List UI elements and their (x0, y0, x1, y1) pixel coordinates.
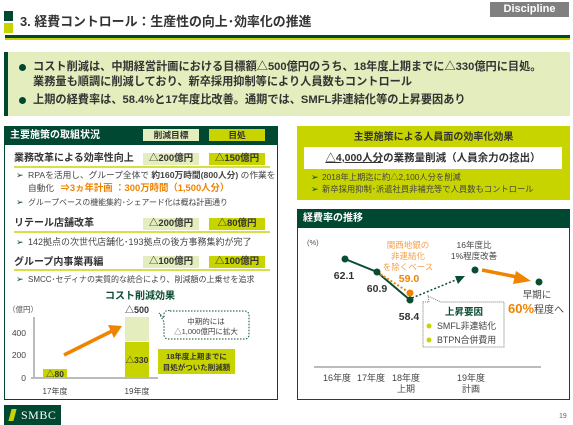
title: 3. 経費コントロール：生産性の向上･効率化の推進 (20, 14, 311, 29)
discipline tag (490, 2, 569, 17)
bar chart: cost reduction: 200 (12, 350, 26, 360)
discipline tag: Discipline (504, 3, 555, 15)
line chart: expense ratio: 関西地銀の (387, 240, 429, 250)
line chart: expense ratio: 計画 (462, 383, 480, 394)
bar chart: cost reduction (8, 304, 158, 396)
headcount callout: △4,000人分の業務量削減（人員余力の捻出） (325, 152, 541, 164)
header rule (5, 35, 570, 40)
line chart: expense ratio: (%) (307, 238, 319, 247)
measure 1 text 2: ➢ (16, 197, 24, 207)
cost reduction chart heading: コスト削減効果 (105, 291, 175, 302)
measure 3 text: SMCC･セディナの実質的な統合により、削減額の上乗せを追求 (28, 275, 255, 284)
headcount heading: 主要施策による人員面の効率化効果 (354, 132, 513, 143)
summary bullet 1: 業務量も順調に削減しており、新卒採用抑制等により人員数もコントロール (33, 76, 412, 88)
bar chart: cost reduction: △330 (126, 355, 149, 365)
column label: prospect (209, 129, 265, 141)
label: achieved amount (158, 349, 235, 374)
headcount text: ➢ (311, 184, 319, 194)
line chart: expense ratio: 18年度 (392, 372, 420, 383)
line chart: expense ratio (307, 238, 564, 394)
line chart: expense ratio: 16年度比 (457, 240, 492, 250)
measure 1 text (16, 170, 275, 192)
callout: medium term: △1,000億円に拡大 (174, 326, 238, 336)
page number: 19 (559, 413, 567, 420)
measure 3 target: △100億円 (149, 256, 193, 267)
logo: SMBC (4, 405, 61, 425)
line chart: expense ratio: 16年度 (323, 372, 351, 383)
bar chart: cost reduction: 19年度 (125, 386, 149, 396)
summary bullet 1 (19, 60, 541, 88)
expense ratio header: 経費率の推移 (303, 213, 363, 224)
measure 3 heading: グループ内事業再編 (14, 257, 103, 268)
line chart: expense ratio: 1%程度改善 (451, 251, 498, 261)
line chart: expense ratio: 60%程度へ (508, 301, 564, 316)
line chart: expense ratio: 早期に (523, 290, 551, 301)
callout: medium term: 中期的には (187, 316, 225, 326)
measure 3 prospect: △100億円 (215, 256, 259, 267)
panel: expense ratio (297, 209, 570, 400)
measure 2 text: ➢ (16, 237, 24, 247)
bar chart: cost reduction: △80 (46, 369, 64, 379)
measure 2 prospect (209, 218, 265, 230)
panel header (4, 126, 278, 145)
expense ratio header (297, 209, 570, 228)
measure 1 text: RPAを活用し、グループ全体で 約160万時間(800人分) の作業を (28, 170, 275, 180)
line chart: expense ratio: BTPN合併費用 (437, 334, 496, 345)
headcount text (311, 172, 534, 194)
summary bullet 2: 上期の経費率は、58.4%と17年度比改善。通期では、SMFL非連結化等の上昇要因あり (33, 94, 466, 106)
line chart: expense ratio: 60.9 (367, 283, 387, 295)
column label: target (143, 129, 199, 141)
headcount callout (304, 147, 562, 169)
headcount text: ➢ (311, 172, 319, 182)
bar chart: cost reduction: 17年度 (43, 386, 67, 396)
line chart: expense ratio: 19年度 (457, 372, 485, 383)
measure 1 heading: 業務改革による効率性向上 (14, 153, 134, 164)
measure 1 prospect: △150億円 (215, 153, 259, 164)
measure 1 text: ➢ (16, 170, 24, 180)
callout: medium term (158, 310, 250, 340)
line chart: expense ratio: を除くベース (383, 262, 433, 272)
measure 2 target: △200億円 (149, 218, 193, 229)
panel header: 主要施策の取組状況 (10, 130, 100, 141)
measure 3 text: ➢ (16, 274, 24, 284)
panel: main measures (4, 126, 278, 400)
headcount text: 2018年上期迄に約△2,100人分を削減 (322, 172, 461, 182)
headcount text: 新卒採用抑制･派遣社員非補充等で人員数もコントロール (322, 184, 534, 194)
line chart: expense ratio: SMFL非連結化 (437, 320, 496, 331)
column label: target: 削減目標 (154, 130, 188, 140)
bar chart: cost reduction: （億円） (8, 304, 38, 314)
bar chart: cost reduction: 400 (12, 328, 26, 338)
label: achieved amount: 18年度上期までに (166, 352, 227, 361)
measure 2 text: 142拠点の次世代店舗化･193拠点の後方事務集約が完了 (28, 237, 252, 247)
panel: headcount efficiency (297, 126, 570, 200)
line chart: expense ratio: 62.1 (334, 270, 354, 282)
measure 2 heading: リテール店舗改革 (14, 218, 94, 229)
summary bullet 1: コスト削減は、中期経営計画における目標額△500億円のうち、18年度上期までに△330億円に目処。 (33, 61, 541, 73)
measure 1 target: △200億円 (149, 153, 193, 164)
line chart: expense ratio: 非連結化 (391, 251, 425, 261)
logo: SMBC: SMBC (21, 408, 56, 422)
column label: prospect: 目処 (228, 130, 246, 140)
measure 1 text: 自動化 ⇒3ヵ年計画 ：300万時間（1,500人分） (28, 182, 229, 192)
header marker (4, 11, 13, 33)
line chart: expense ratio: 59.0 (399, 273, 419, 285)
bar chart: cost reduction: 0 (21, 373, 26, 383)
line chart: expense ratio: 17年度 (357, 372, 385, 383)
line chart: expense ratio: 上期 (397, 384, 415, 394)
measure 1 text 2: グループベースの機能集約･シェアード化は概ね計画通り (28, 198, 228, 207)
label: achieved amount: 目処がついた削減額 (163, 363, 230, 372)
line chart: expense ratio: 58.4 (399, 311, 419, 323)
bar chart: cost reduction: △500 (125, 305, 149, 315)
measure 2 prospect: △80億円 (217, 218, 257, 229)
line chart: expense ratio: 上昇要因 (445, 306, 483, 318)
panel: summary (4, 52, 570, 116)
